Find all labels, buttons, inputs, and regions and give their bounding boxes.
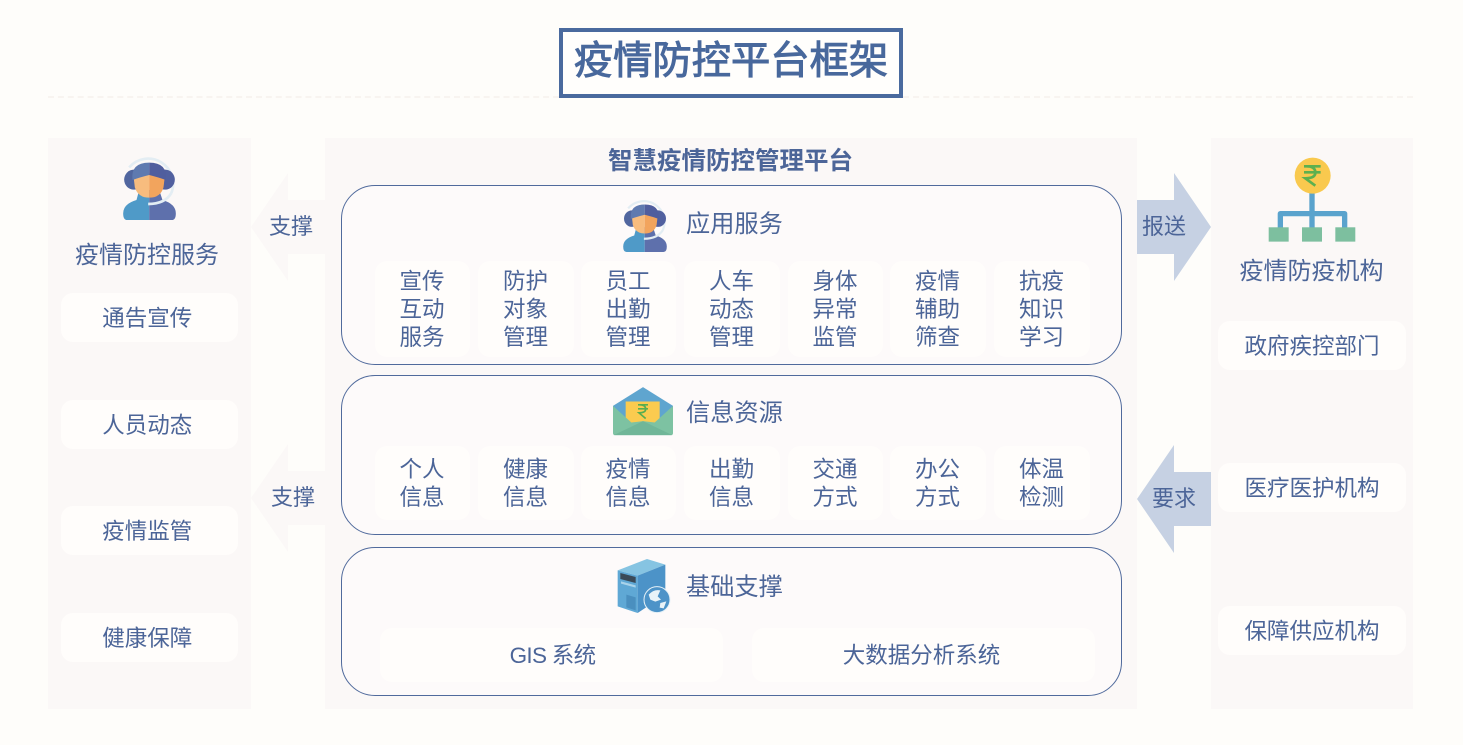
card: 抗疫知识学习: 抗疫	[1019, 269, 1064, 294]
card: 健康信息: 健康	[503, 457, 548, 482]
item: 政府疾控部门: 政府疾控部门	[1244, 334, 1380, 358]
icon: service agent	[623, 200, 667, 252]
arrow: 报送: 报送	[1142, 214, 1186, 239]
card: 健康信息	[478, 446, 574, 520]
panel: 智慧疫情防控管理平台	[325, 138, 1137, 709]
card: 身体异常监管: 异常	[812, 297, 858, 322]
card: GIS 系统: GIS 系统	[510, 643, 595, 668]
arrow: 要求: 要求	[1152, 486, 1196, 511]
icon: service agent	[123, 157, 176, 220]
arrow: 要求	[1137, 445, 1211, 553]
card: 防护对象管理: 管理	[503, 325, 548, 350]
card: 办公方式: 办公	[915, 457, 960, 482]
icon: server with globe	[618, 559, 670, 613]
card: 宣传互动服务: 服务	[399, 325, 444, 350]
title	[559, 28, 903, 98]
card: 人车动态管理: 人车	[709, 269, 754, 294]
card: 抗疫知识学习	[994, 261, 1090, 357]
arrow: 支撑 upper: 支撑	[269, 214, 313, 239]
card: 人车动态管理: 动态	[709, 297, 754, 322]
icon: organisation tree	[1268, 158, 1356, 242]
item: 人员动态: 人员动态	[102, 412, 192, 438]
card: 员工出勤管理: 员工	[605, 269, 650, 294]
arrow: 支撑 lower: 支撑	[271, 485, 315, 510]
card: 疫情辅助筛查: 疫情	[915, 269, 960, 294]
item: 医疗医护机构	[1218, 463, 1406, 512]
item: 政府疾控部门	[1218, 321, 1406, 370]
card: 宣传互动服务	[375, 261, 470, 357]
card: 体温检测: 体温	[1019, 457, 1064, 482]
panel: 应用服务	[341, 185, 1122, 365]
card: 员工出勤管理: 出勤	[605, 297, 650, 322]
item: 通告宣传: 通告宣传	[102, 306, 192, 330]
card: 个人信息: 信息	[399, 485, 444, 510]
item: 通告宣传	[61, 293, 238, 342]
card: 疫情辅助筛查: 筛查	[915, 325, 960, 350]
card: 疫情信息: 疫情	[605, 457, 650, 482]
item: 健康保障: 健康保障	[102, 626, 192, 650]
card: 防护对象管理	[478, 261, 574, 357]
card: 交通方式: 交通	[812, 457, 858, 482]
card: GIS 系统	[380, 628, 723, 682]
card: 防护对象管理: 对象	[503, 297, 548, 322]
item: 疫情监管: 疫情监管	[102, 518, 192, 544]
card: 宣传互动服务: 宣传	[399, 269, 444, 294]
icon: envelope	[613, 387, 673, 436]
card: 身体异常监管: 身体	[812, 269, 858, 294]
item: 人员动态	[61, 400, 238, 449]
item: 疫情监管	[61, 506, 238, 555]
card: 人车动态管理: 管理	[709, 325, 754, 350]
card: 交通方式: 方式	[812, 485, 858, 510]
panel: 信息资源	[341, 375, 1122, 535]
card: 疫情辅助筛查: 辅助	[915, 297, 960, 322]
card: 大数据分析系统	[752, 628, 1095, 682]
item: 医疗医护机构: 医疗医护机构	[1244, 476, 1380, 500]
card: 抗疫知识学习: 学习	[1019, 325, 1064, 350]
item: 保障供应机构	[1218, 606, 1406, 655]
card: 交通方式	[788, 446, 883, 520]
panel: 疫情防疫机构	[1211, 138, 1413, 709]
item: 保障供应机构: 保障供应机构	[1244, 618, 1380, 644]
card: 身体异常监管	[788, 261, 883, 357]
card: 员工出勤管理	[581, 261, 676, 357]
card: 出勤信息	[684, 446, 780, 520]
card: 个人信息: 个人	[399, 457, 444, 482]
item: 健康保障	[61, 613, 238, 662]
heading: 应用服务: 应用服务	[686, 211, 783, 238]
card: 办公方式	[890, 446, 986, 520]
card: 体温检测	[994, 446, 1090, 520]
card: 出勤信息: 信息	[709, 485, 754, 510]
card: 宣传互动服务: 互动	[399, 297, 444, 322]
panel: 疫情防控服务	[48, 138, 251, 709]
card: 人车动态管理	[684, 261, 780, 357]
card: 体温检测: 检测	[1019, 485, 1064, 510]
panel: 基础支撑	[341, 547, 1122, 696]
arrow: 报送	[1137, 173, 1211, 281]
card: 出勤信息: 出勤	[709, 457, 754, 482]
heading: 疫情防控服务: 疫情防控服务	[75, 242, 219, 269]
heading: 智慧疫情防控管理平台: 智慧疫情防控管理平台	[608, 148, 853, 175]
card: 身体异常监管: 监管	[812, 325, 858, 350]
card: 个人信息	[375, 446, 470, 520]
card: 抗疫知识学习: 知识	[1019, 297, 1064, 322]
title: 疫情防控平台框架	[574, 39, 888, 83]
heading: 基础支撑: 基础支撑	[686, 574, 783, 601]
card: 防护对象管理: 防护	[503, 269, 548, 294]
card: 疫情信息	[581, 446, 676, 520]
card: 员工出勤管理: 管理	[605, 325, 650, 350]
card: 大数据分析系统: 大数据分析系统	[843, 643, 1000, 668]
card: 健康信息: 信息	[503, 485, 548, 510]
card: 疫情信息: 信息	[605, 485, 650, 510]
card: 疫情辅助筛查	[890, 261, 986, 357]
card: 办公方式: 方式	[915, 485, 960, 510]
heading: 疫情防疫机构: 疫情防疫机构	[1240, 258, 1384, 285]
heading: 信息资源: 信息资源	[686, 400, 783, 427]
